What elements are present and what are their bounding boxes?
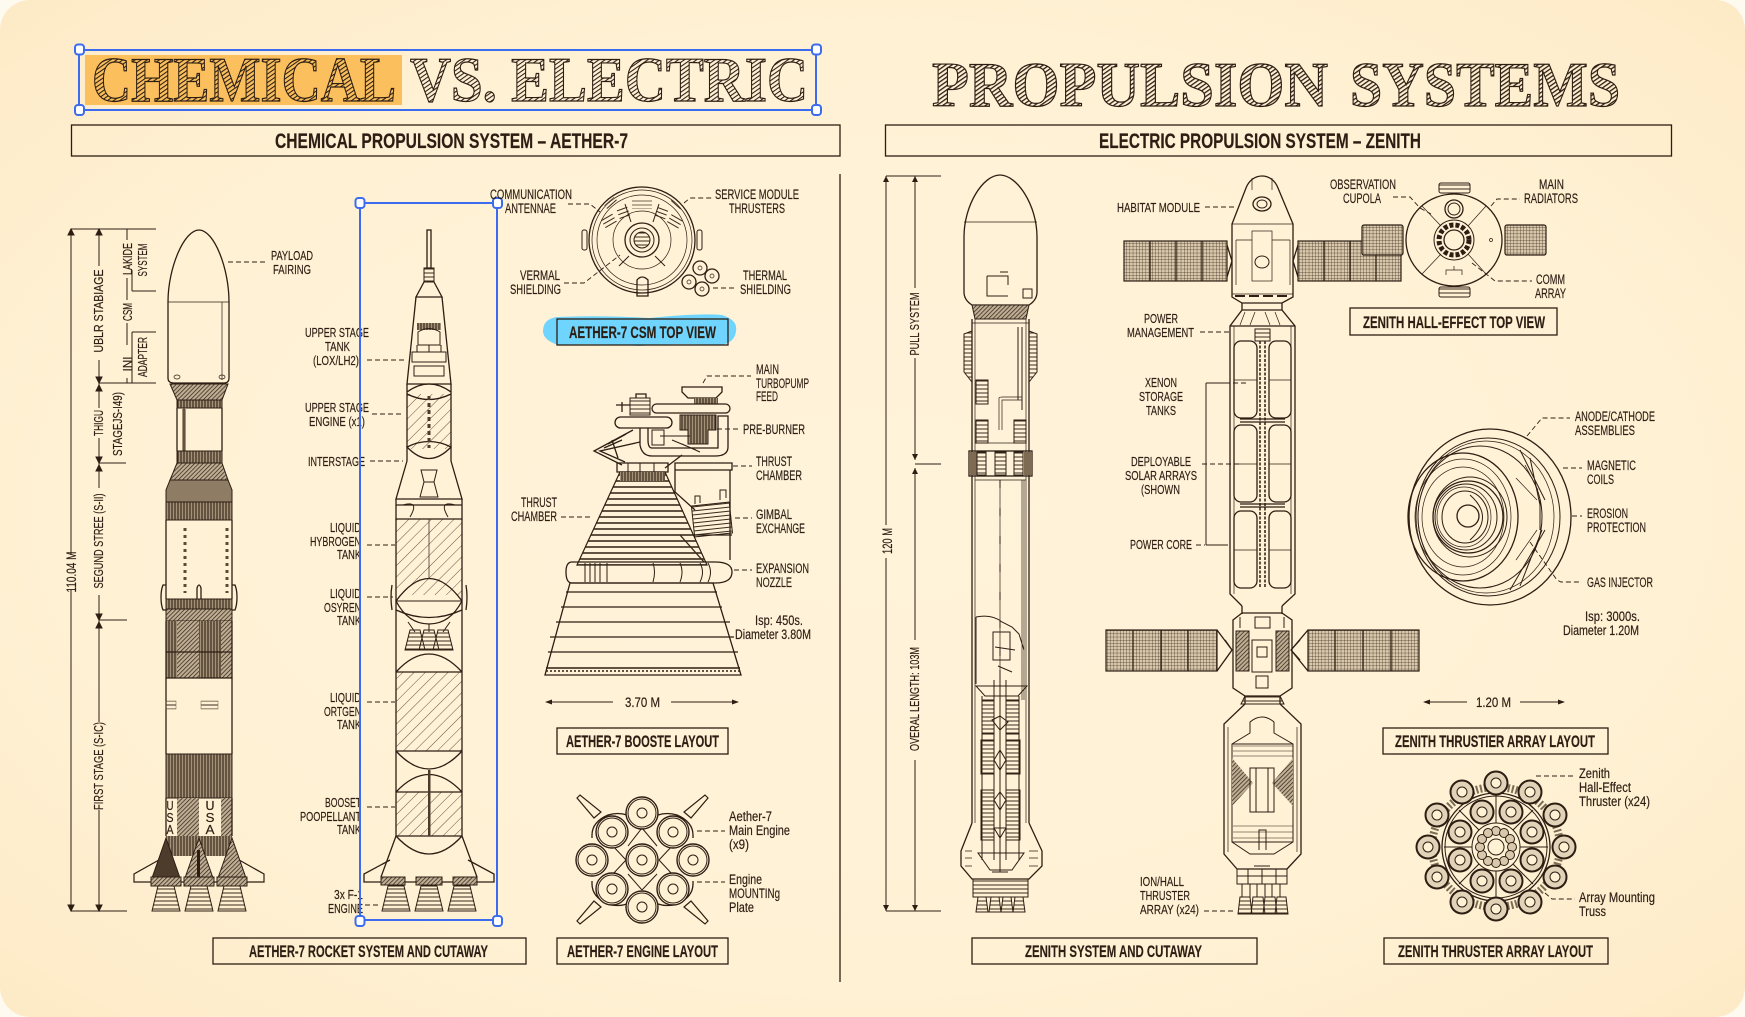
lower solar arrays [1106, 630, 1217, 671]
label: communication antennae [490, 187, 600, 216]
icon: Zenith station [1106, 176, 1419, 914]
header: electric system: ELECTRIC PROPULSION SYSTEM – ZENITH [1099, 130, 1421, 153]
label: main engine: (x9) [729, 837, 749, 852]
lower nozzle [545, 583, 741, 675]
hydrogen tank [396, 519, 462, 595]
label: liquid oxygen tank upper: OSYREN [324, 600, 361, 615]
label: comm array: COMM [1536, 272, 1565, 287]
thruster array [1237, 869, 1287, 884]
right housing [675, 463, 732, 560]
second stage [166, 502, 232, 520]
selection frame: title [75, 44, 821, 115]
label: upper stage tank: UPPER STAGE [305, 325, 369, 340]
dimension lines: chemical rocket [64, 229, 156, 911]
label: thrust chamber right: CHAMBER [756, 468, 802, 483]
label: thrust chamber left: CHAMBER [511, 509, 557, 524]
caption: Zenith hall-effect top view [1350, 308, 1557, 335]
caption: thruster array layout lower [1384, 938, 1608, 964]
torn reveal [976, 616, 1024, 684]
label: main turbopump feed: FEED [756, 389, 778, 404]
labels: hall-effect thruster [1527, 409, 1655, 638]
dimension: 3.70 M [545, 695, 739, 710]
title right: Propulsion Systems [932, 50, 1620, 120]
label: liquid oxygen tank lower: TANK [337, 717, 361, 732]
label: habitat module: HABITAT MODULE [1117, 200, 1200, 215]
labels: CSM top view [490, 187, 799, 297]
label: engine mounting plate: Plate [729, 900, 754, 915]
upper solar arrays [1124, 241, 1401, 281]
icon: Zenith top view [1362, 183, 1546, 297]
label: vermal shielding [510, 255, 620, 297]
turbopump [682, 387, 722, 398]
label: zenith hall-effect thruster: Zenith [1579, 766, 1610, 781]
title word: Chemical: CHEMICAL [92, 45, 396, 115]
label: vermal shielding: VERMAL [520, 268, 560, 283]
labels: cutaway rocket [300, 325, 405, 916]
xenon tanks [1234, 341, 1291, 588]
label: thermal shielding: THERMAL [743, 268, 787, 283]
label: payload fairing: FAIRING [273, 262, 311, 277]
label: power core: POWER CORE [1130, 537, 1192, 552]
rocket cutaway: Aether-7 [364, 230, 494, 911]
dimension lines: chemical rocket: CSM [120, 303, 135, 321]
label: gas injector: GAS INJECTOR [1587, 575, 1653, 590]
label: zenith hall-effect thruster: Thruster (x24) [1579, 794, 1650, 809]
upper tank [407, 394, 451, 449]
label: anode cathode assemblies: ASSEMBLIES [1575, 423, 1635, 438]
spec text: chemical engine: Isp: 450s. [755, 613, 803, 628]
label: upper stage engine [305, 400, 404, 429]
interstage cone [170, 463, 228, 480]
label: magnetic coils [1563, 458, 1636, 487]
caption: booster layout [557, 728, 728, 754]
label: booster propellant tank: POOPELLANT [300, 809, 361, 824]
label: service module thrusters [684, 187, 799, 216]
upper nozzle [577, 472, 707, 565]
caption: thruster array layout upper: ZENITH THRUSTIER ARRAY LAYOUT [1395, 733, 1595, 751]
highlight behind Chemical [85, 55, 402, 105]
dimension lines: chemical rocket: THIGU [91, 410, 106, 436]
caption: Zenith system and cutaway [972, 938, 1257, 964]
labels: rocket engine [511, 362, 811, 642]
label: upper stage tank: (LOX/LH2) [313, 353, 359, 368]
label: booster propellant tank: BOOSET [325, 795, 361, 810]
label: deployable solar arrays: (SHOWN [1141, 482, 1180, 497]
base fins [134, 856, 264, 882]
label: magnetic coils: COILS [1587, 472, 1614, 487]
label: zenith hall-effect thruster [1536, 766, 1650, 809]
label: liquid hydrogen tank [310, 520, 395, 562]
label: F-1 engine: 3x F-1 [334, 887, 363, 902]
label: anode cathode assemblies: ANODE/CATHODE [1575, 409, 1655, 424]
label: liquid oxygen tank lower [324, 690, 395, 732]
dimension lines: chemical rocket: ADAPTER [135, 337, 150, 377]
rocket exterior: Aether-7: U [166, 798, 174, 813]
title right: Propulsion Systems: PROPULSION [932, 50, 1328, 120]
interstage with upper engine [396, 461, 462, 499]
label: main radiators: MAIN [1539, 177, 1564, 192]
skirt [961, 823, 1042, 879]
label: main engine: Aether-7 [729, 809, 772, 824]
plumbing [640, 416, 728, 456]
label: liquid hydrogen tank: LIQUID [330, 520, 361, 535]
engine module [1228, 727, 1297, 852]
caption: thruster array layout lower: ZENITH THRUSTER ARRAY LAYOUT [1398, 943, 1593, 961]
label: main turbopump feed [703, 362, 809, 404]
title left: Chemical vs. Electric [85, 45, 808, 115]
avionics band [969, 451, 1032, 476]
label: comm array [1472, 263, 1566, 301]
label: upper stage tank [305, 325, 405, 368]
label: liquid oxygen tank upper: TANK [337, 613, 361, 628]
thruster row [973, 879, 1028, 897]
label: main engine [697, 809, 790, 852]
fuel lines [1000, 480, 1024, 700]
label: ion hall thruster array [1140, 874, 1235, 917]
caption: booster layout: AETHER-7 BOOSTE LAYOUT [566, 733, 719, 751]
label: liquid oxygen tank upper: LIQUID [330, 586, 361, 601]
dimension lines: Zenith rocket: OVERAL LENGTH: 103M [907, 647, 922, 751]
rocket exterior: Aether-7 [134, 230, 264, 911]
label: engine mounting plate: Engine [729, 872, 762, 887]
dimension lines: Zenith rocket: 120 M [880, 528, 895, 554]
dimension lines: Zenith rocket: PULL SYSTEM [907, 292, 922, 356]
label: thrust chamber left: THRUST [521, 495, 557, 510]
icon: thruster array [1416, 772, 1576, 920]
label: payload fairing: PAYLOAD [271, 248, 313, 263]
label: interstage: INTERSTAGE [308, 454, 365, 469]
label: liquid oxygen tank lower: ORTGEN [324, 704, 361, 719]
dimension lines: chemical rocket: LAKIDE [120, 243, 135, 275]
caption: Zenith hall-effect top view: ZENITH HALL-EFFECT TOP VIEW [1363, 314, 1545, 332]
rocket exterior: Aether-7: A [166, 822, 174, 837]
dimension lines: chemical rocket: UBLR STABIAGE [91, 269, 106, 352]
label: gimbal exchange: EXCHANGE [756, 521, 805, 536]
USA section [177, 798, 199, 836]
label: xenon storage tanks: STORAGE [1139, 389, 1183, 404]
label: main radiators: RADIATORS [1524, 191, 1578, 206]
title right: Propulsion Systems: SYSTEMS [1350, 50, 1620, 120]
label: expansion nozzle: NOZZLE [756, 575, 792, 590]
booster tank [396, 792, 462, 836]
label: observation cupola: CUPOLA [1343, 191, 1381, 206]
label: array mounting truss: Array Mounting [1579, 890, 1655, 905]
dimension lines: chemical rocket: SYSTEM [135, 244, 150, 276]
label: pre-burner [717, 422, 805, 437]
caption: rocket system and cutaway: AETHER-7 ROCKET SYSTEM AND CUTAWAY [249, 943, 488, 961]
fairing [964, 175, 1037, 305]
label: liquid hydrogen tank: HYBROGEN [310, 534, 361, 549]
label: ion hall thruster array: THRUSTER [1140, 888, 1190, 903]
rocket exterior: Aether-7: U [206, 798, 214, 813]
label: erosion protection [1572, 506, 1646, 535]
label: thermal shielding [713, 268, 791, 297]
dimension: 1.20 M: 1.20 M [1476, 695, 1511, 710]
caption: rocket system and cutaway [213, 938, 526, 964]
label: booster propellant tank [300, 795, 395, 837]
label: xenon storage tanks: XENON [1145, 375, 1177, 390]
label: deployable solar arrays: SOLAR ARRAYS [1125, 468, 1197, 483]
caption: thruster array layout upper [1383, 728, 1608, 754]
label: communication antennae: ANTENNAE [505, 201, 556, 216]
dimension lines: chemical rocket: 110.04 M [64, 552, 79, 592]
icon: rocket engine with nozzle [545, 387, 741, 675]
spec text: chemical engine: Diameter 3.80M [735, 627, 811, 642]
header: chemical system [72, 125, 840, 156]
label: pre-burner: PRE-BURNER [743, 422, 805, 437]
F-1 engines [382, 886, 410, 911]
dimension lines: chemical rocket: SEGUND STREE (S-II) [91, 494, 106, 588]
power core module [1224, 606, 1301, 869]
label: power management: MANAGEMENT [1127, 325, 1194, 340]
engine stack [976, 686, 1027, 696]
dimension lines: chemical rocket: STAGEJS-I49) [110, 392, 125, 456]
label: main turbopump feed: MAIN [756, 362, 779, 377]
label: vermal shielding: SHIELDING [510, 282, 561, 297]
escape tower and capsule [427, 230, 431, 268]
spec text: electric thruster: Isp: 3000s. [1585, 609, 1640, 624]
label: communication antennae: COMMUNICATION [490, 187, 572, 202]
rocket exterior: Aether-7: A [206, 822, 215, 837]
dimension lines: chemical rocket: INI [120, 356, 135, 372]
label: power management [1127, 311, 1230, 340]
label: main turbopump feed: TURBOPUMP [756, 376, 809, 391]
blue highlight blob [543, 314, 736, 346]
body [972, 319, 1029, 823]
side pods [964, 331, 972, 382]
dimension: 1.20 M [1423, 695, 1565, 710]
label: gas injector [1530, 542, 1653, 590]
label: observation cupola [1330, 177, 1431, 214]
label: upper stage engine: ENGINE (x1) [309, 414, 365, 429]
labels: Zenith station [1117, 200, 1247, 917]
label: xenon storage tanks: TANKS [1146, 403, 1176, 418]
caption: engine layout [557, 938, 728, 964]
skirt and fins [381, 836, 477, 877]
rocket exterior: Aether-7: S [166, 810, 174, 825]
label: array mounting truss [1545, 890, 1655, 919]
rocket cutaway: Zenith [961, 175, 1042, 912]
label: array mounting truss: Truss [1579, 904, 1606, 919]
label: main radiators [1491, 177, 1578, 206]
label: F-1 engine: ENGINE [328, 901, 363, 916]
icon: engine layout [576, 795, 709, 924]
gimbal struts [594, 430, 640, 465]
caption: engine layout: AETHER-7 ENGINE LAYOUT [567, 943, 718, 961]
label: thrust chamber right [733, 454, 802, 483]
label: main engine: Main Engine [729, 823, 790, 838]
label: magnetic coils: MAGNETIC [1587, 458, 1636, 473]
label: power management: POWER [1144, 311, 1178, 326]
label: observation cupola: OBSERVATION [1330, 177, 1396, 192]
label: gimbal exchange [735, 507, 805, 536]
label: booster propellant tank: TANK [337, 822, 361, 837]
spec text: electric thruster [1563, 609, 1640, 638]
label: xenon storage tanks [1139, 375, 1247, 545]
dimension lines: chemical rocket: FIRST STAGE (S-IC) [91, 722, 106, 810]
label: expansion nozzle: EXPANSION [756, 561, 809, 576]
white band with flags [166, 678, 232, 754]
first stage blocks [166, 621, 177, 678]
label: liquid hydrogen tank: TANK [337, 547, 361, 562]
label: erosion protection: PROTECTION [1587, 520, 1646, 535]
label: anode cathode assemblies [1527, 409, 1655, 438]
caption: CSM top view with blue highlight: AETHER-7 CSM TOP VIEW [569, 324, 716, 342]
header: chemical system: CHEMICAL PROPULSION SYSTEM – AETHER-7 [275, 130, 628, 153]
label: service module thrusters: SERVICE MODULE [715, 187, 799, 202]
label: service module thrusters: THRUSTERS [729, 201, 785, 216]
label: upper stage engine: UPPER STAGE [305, 400, 369, 415]
label: payload fairing [228, 248, 313, 277]
title words: vs. Electric: VS. ELECTRIC [410, 45, 808, 115]
label: ion hall thruster array: ION/HALL [1140, 874, 1184, 889]
thermal shielding cluster [682, 261, 719, 296]
label: deployable solar arrays: DEPLOYABLE [1131, 454, 1191, 469]
header: electric system [886, 125, 1672, 156]
third stage [170, 384, 228, 400]
label: gimbal exchange: GIMBAL [756, 507, 792, 522]
payload fairing [168, 230, 229, 383]
spec text: electric thruster: Diameter 1.20M [1563, 623, 1639, 638]
label: ion hall thruster array: ARRAY (x24) [1140, 902, 1199, 917]
equipment box [976, 380, 988, 404]
label: thrust chamber right: THRUST [756, 454, 792, 469]
habitat module [1232, 176, 1293, 303]
label: liquid oxygen tank lower: LIQUID [330, 690, 361, 705]
dimension lines: Zenith rocket [880, 176, 941, 911]
dimension: 3.70 M: 3.70 M [625, 695, 660, 710]
label: thrust chamber left [511, 495, 590, 524]
caption: CSM top view with blue highlight [543, 314, 736, 346]
caption: Zenith system and cutaway: ZENITH SYSTEM AND CUTAWAY [1025, 943, 1202, 961]
engines [152, 886, 180, 911]
label: thermal shielding: SHIELDING [740, 282, 791, 297]
icon: CSM top view [582, 187, 719, 296]
label: zenith hall-effect thruster: Hall-Effect [1579, 780, 1631, 795]
label: erosion protection: EROSION [1587, 506, 1628, 521]
torus [566, 562, 732, 583]
label: upper stage tank: TANK [325, 339, 350, 354]
icon: hall-effect thruster [1408, 429, 1571, 605]
spec text: chemical engine [735, 613, 811, 642]
label: expansion nozzle [734, 561, 809, 590]
selection frame: cutaway rocket [356, 198, 502, 926]
rocket exterior: Aether-7: S [206, 810, 215, 825]
stage engines [405, 630, 425, 650]
label: liquid oxygen tank upper [324, 586, 393, 628]
label: F-1 engine [328, 887, 380, 916]
label: deployable solar arrays [1125, 454, 1242, 497]
label: engine mounting plate: MOUNTINg [729, 886, 780, 901]
label: comm array: ARRAY [1535, 286, 1566, 301]
liquid oxygen tank [396, 672, 462, 751]
labels: Zenith top view [1330, 177, 1578, 301]
power management collar [1230, 303, 1295, 606]
label: engine mounting plate [697, 872, 780, 915]
